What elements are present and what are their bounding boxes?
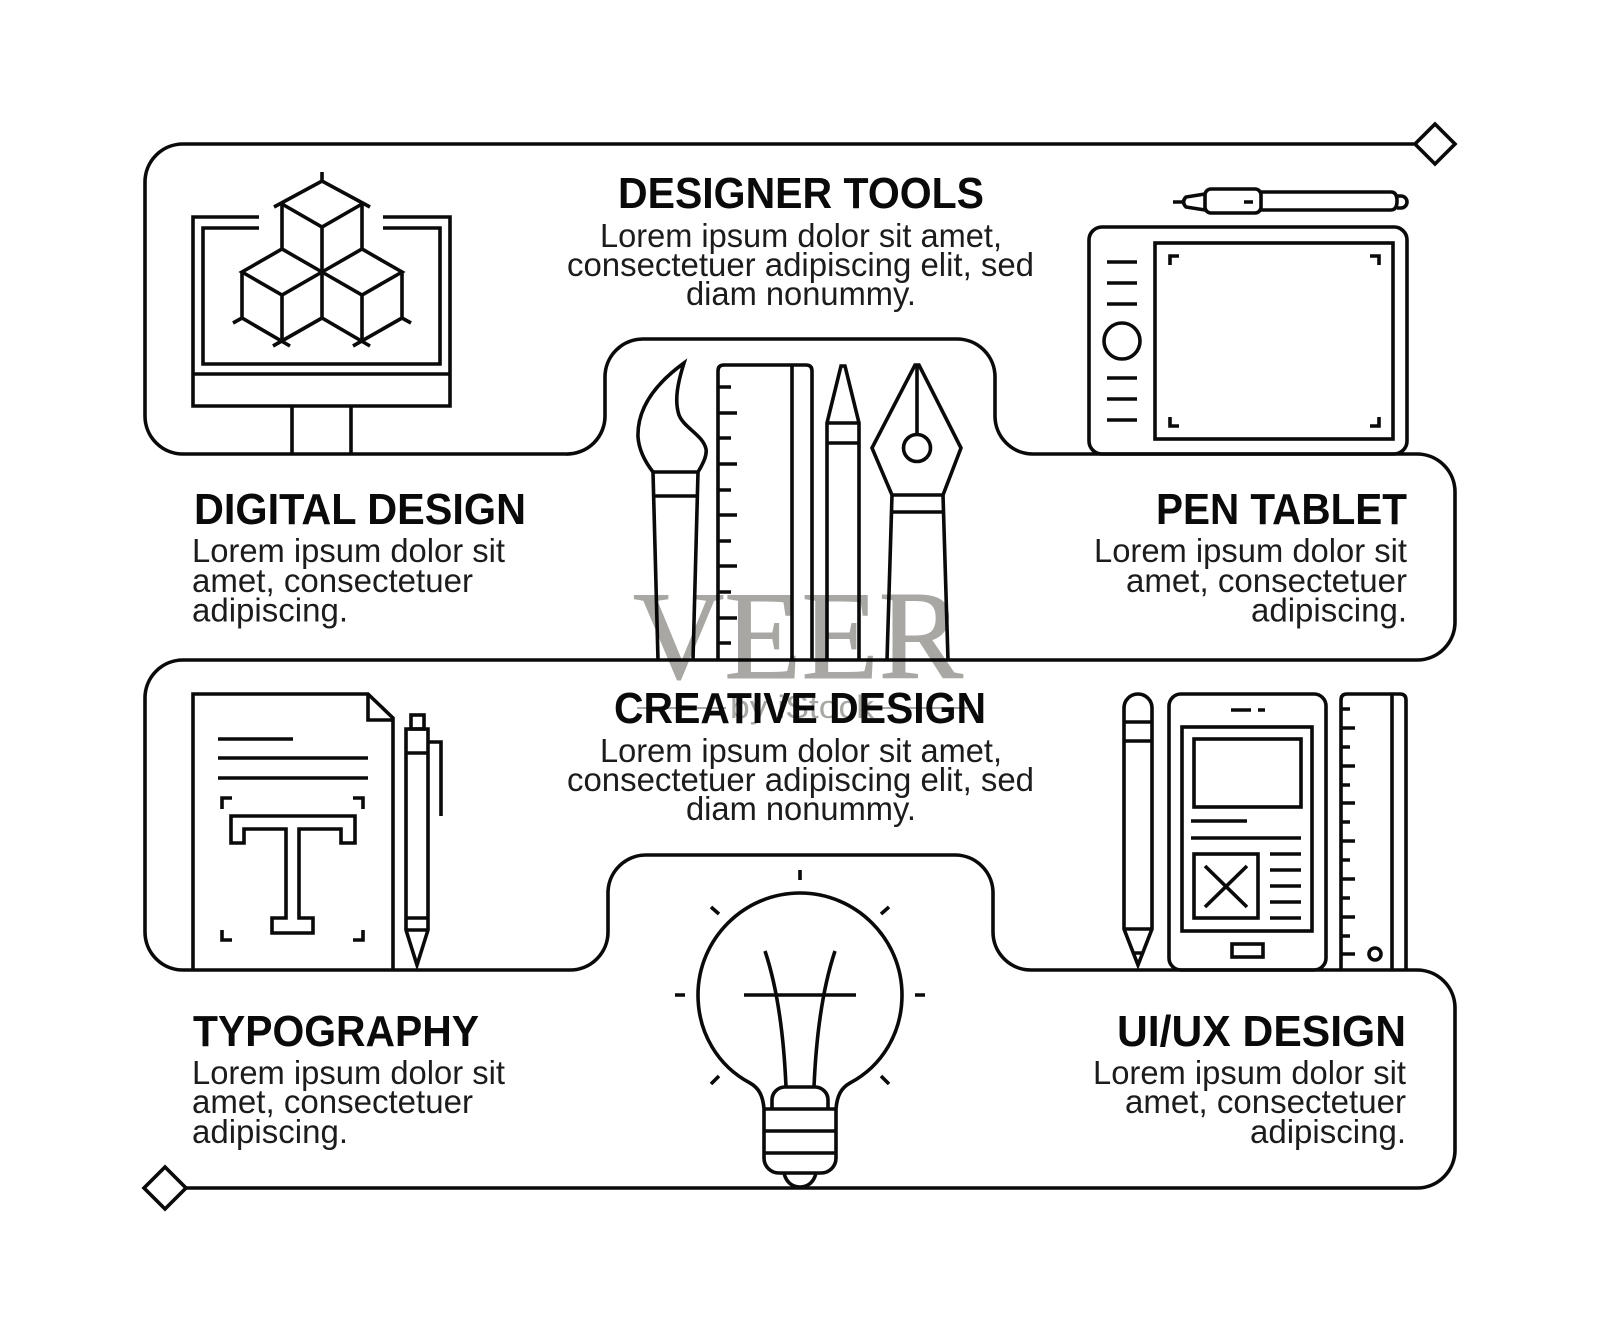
text block: designer tools: consectetuer adipiscing elit, sed (567, 246, 1034, 283)
icon: typography document (193, 694, 393, 970)
text block: digital design: DIGITAL DESIGN (194, 485, 526, 534)
text block: typography: adipiscing. (192, 1113, 348, 1150)
text block: creative design: consectetuer adipiscing elit, sed (567, 761, 1034, 798)
text block: creative design: Lorem ipsum dolor sit amet, (600, 732, 1002, 769)
text block: typography: TYPOGRAPHY (193, 1007, 479, 1056)
text block: ui/ux design: amet, consectetuer (1125, 1083, 1406, 1120)
text block: pen tablet: amet, consectetuer (1126, 562, 1407, 599)
watermark: VEER (633, 567, 963, 706)
icon: pen tablet and stylus (1089, 189, 1407, 454)
icon: light bulb (675, 870, 925, 1187)
text block: pen tablet (1094, 485, 1407, 628)
text block: designer tools: diam nonummy. (686, 275, 916, 312)
connecting outline path (145, 144, 1455, 1188)
icon: phone wireframe (1169, 694, 1326, 970)
text block: creative design: diam nonummy. (686, 790, 916, 827)
text block: designer tools (567, 169, 1034, 312)
text block: digital design: Lorem ipsum dolor sit (192, 532, 505, 569)
text block: ui/ux design (1093, 1007, 1406, 1150)
icon: fountain pen nib (872, 365, 961, 660)
text block: ui/ux design: adipiscing. (1250, 1113, 1406, 1150)
text block: digital design: amet, consectetuer (192, 562, 473, 599)
text block: pen tablet: adipiscing. (1251, 592, 1407, 628)
icon: pencil on UI side (1124, 694, 1152, 965)
start diamond marker (1415, 124, 1455, 164)
icon: paint brush (638, 363, 706, 660)
text block: typography: Lorem ipsum dolor sit (192, 1054, 505, 1091)
text block: creative design: CREATIVE DESIGN (614, 684, 986, 733)
icon: mechanical pen (406, 715, 441, 965)
text block: designer tools: DESIGNER TOOLS (618, 169, 984, 218)
text block: typography: amet, consectetuer (192, 1083, 473, 1120)
text block: digital design: adipiscing. (192, 592, 348, 628)
text block: pen tablet: PEN TABLET (1156, 485, 1407, 534)
text block: designer tools: Lorem ipsum dolor sit amet, (600, 217, 1002, 254)
text block: typography (192, 1007, 505, 1150)
icon: monitor with cubes (193, 172, 450, 454)
watermark: by iStock (730, 689, 875, 725)
icon: small ruler (1341, 694, 1406, 970)
icon: ruler (718, 365, 812, 660)
text block: digital design (192, 485, 526, 628)
text block: pen tablet: Lorem ipsum dolor sit (1094, 532, 1407, 569)
end diamond marker (144, 1167, 186, 1209)
text block: creative design (567, 684, 1034, 827)
text block: ui/ux design: UI/UX DESIGN (1117, 1007, 1406, 1056)
text block: ui/ux design: Lorem ipsum dolor sit (1093, 1054, 1406, 1091)
icon: pencil (827, 366, 859, 660)
